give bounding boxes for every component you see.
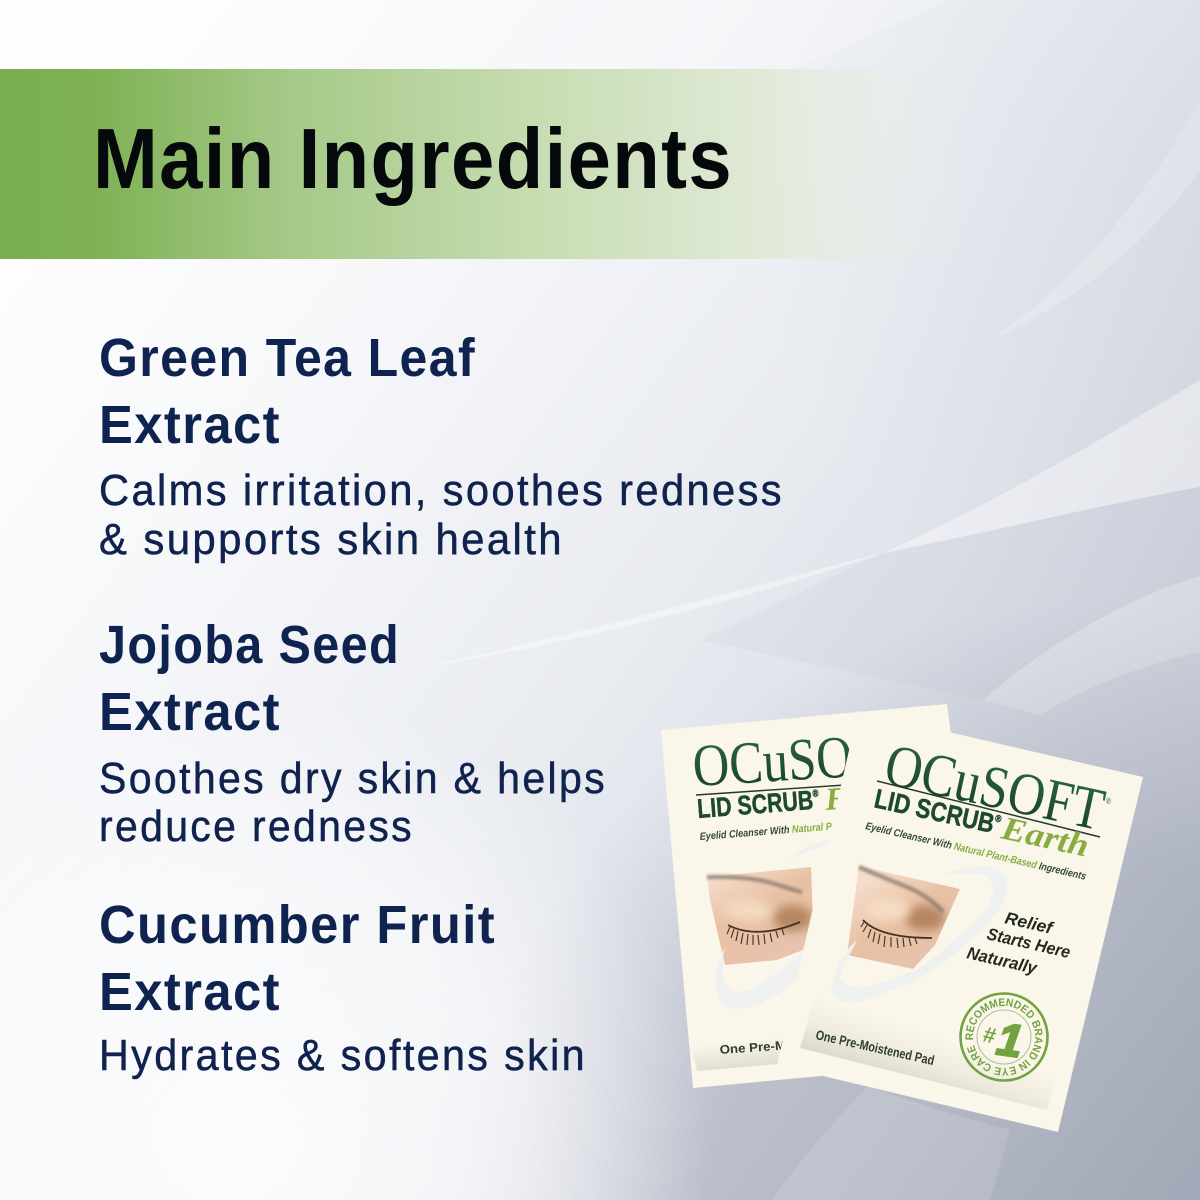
badge: #1 recommended: # [981,1022,998,1049]
description: jojoba: Soothes dry skin & helps [99,754,607,803]
brand name: ® [1105,795,1113,806]
product name: ® [994,813,1003,826]
green title band [0,69,960,259]
heading: jojoba: Extract [99,682,281,742]
slogan: Naturally [965,943,1040,978]
description: cucumber: Hydrates & softens skin [99,1031,587,1080]
panel: green tea leaf extract [99,328,784,564]
eye photo: front [847,866,960,969]
cream swoosh: front [832,866,1007,1003]
heading: green tea: Green Tea Leaf [99,328,476,388]
product: lid scrub sachets [661,704,1147,1132]
pad count: One Pre-Moistened Pad [814,1027,936,1068]
description: green tea: Calms irritation, soothes redness [99,466,784,515]
heading: cucumber [99,895,496,1022]
description: jojoba: reduce redness [99,802,414,851]
sachet: back: E [823,780,848,817]
heading: green tea: Extract [99,395,281,455]
heading: cucumber: Cucumber Fruit [99,895,496,955]
product name: LID SCRUB [872,784,1022,844]
slogan: Starts Here [985,924,1072,962]
title: Main Ingredients [93,112,733,207]
sachet: front: Earth [997,810,1092,865]
brand name: OCuSOFT [879,731,1147,851]
heading: jojoba [99,615,400,742]
sachet: back: LID SCRUB [696,783,845,824]
badge: #1 recommended: RECOMMENDED BRAND IN EYE CARE [965,998,1042,1076]
heading: cucumber: Extract [99,962,281,1022]
panel: jojoba seed extract [99,615,607,851]
description: green tea: & supports skin health [99,515,564,564]
eye photo: back [707,867,813,965]
description: jojoba [99,754,607,851]
badge: #1 recommended: 1 [994,1012,1026,1067]
sachet: back: OCuSO [691,723,854,799]
sachet: front [777,711,1147,1132]
panel: cucumber fruit extract [99,895,587,1080]
heading: jojoba: Jojoba Seed [99,615,400,675]
sachet: back: Eyelid Cleanser With Natural Pla [699,820,840,843]
sachet: back [661,704,951,1088]
heading: green tea [99,328,476,455]
description: green tea [99,466,784,564]
cream swoosh: back [716,838,836,1009]
slogan: Relief [1003,908,1057,938]
tagline: Eyelid Cleanser With Natural Plant-Based Ingredients [864,820,1087,883]
slogan [965,908,1072,978]
sachet: back: ® [812,788,819,800]
sachet: back: One Pre-Moist [719,1037,811,1057]
